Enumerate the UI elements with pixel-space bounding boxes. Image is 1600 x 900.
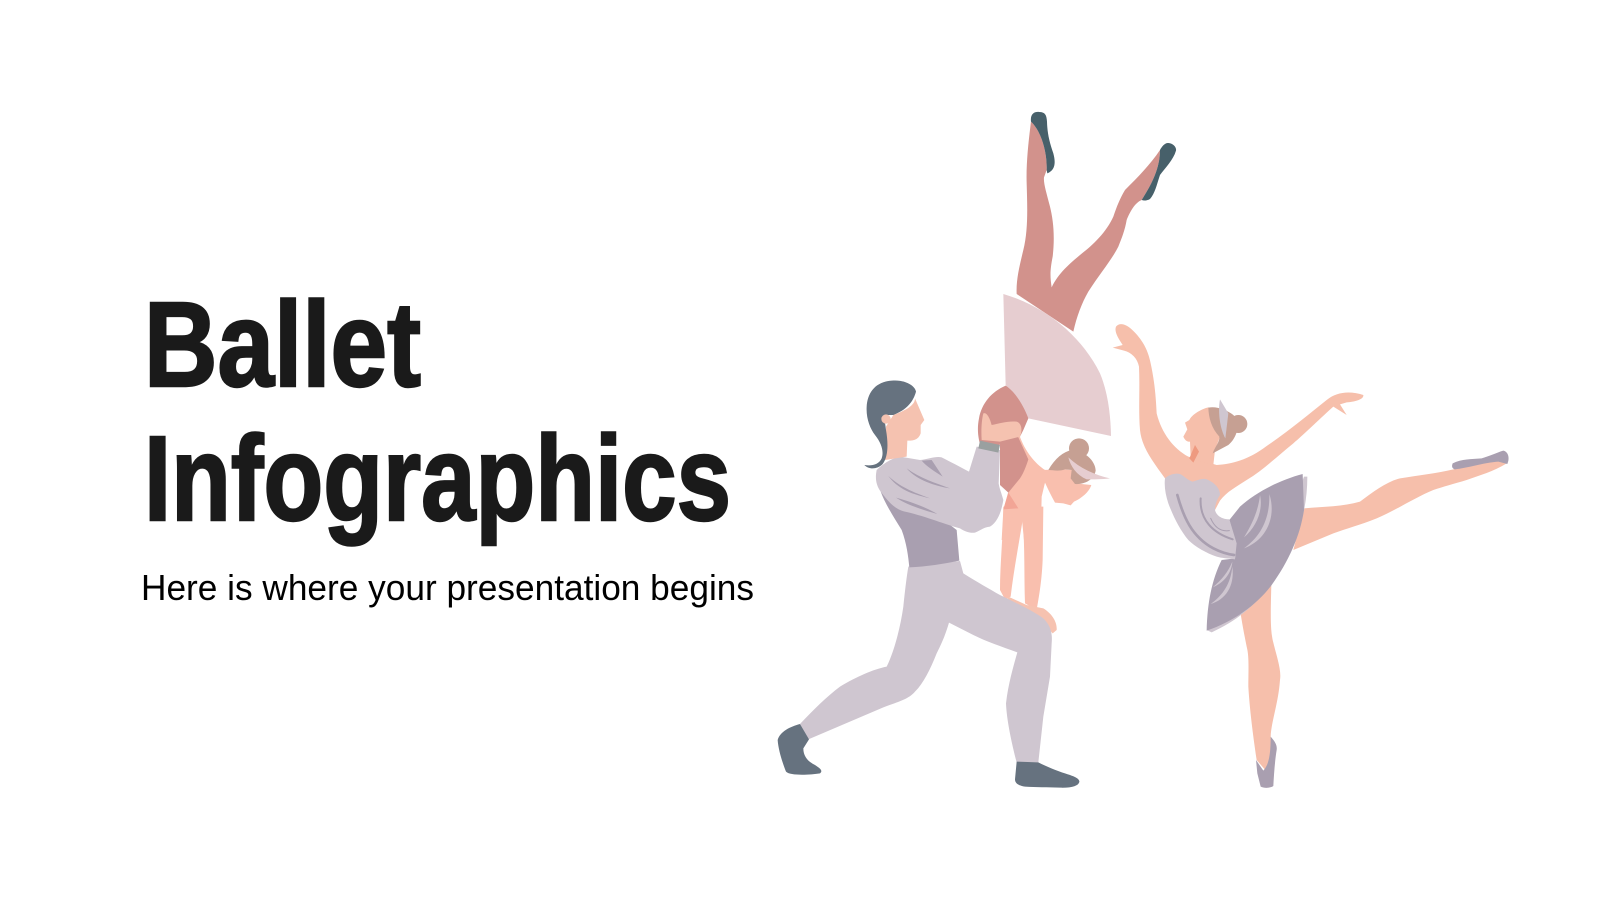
face and neck [1183, 407, 1220, 465]
shirt [876, 447, 1003, 533]
bun [1229, 415, 1247, 433]
tiara [1068, 457, 1110, 479]
left shoe [778, 724, 821, 775]
bodice [1000, 437, 1028, 493]
skirt folds [1211, 494, 1272, 604]
cuff [978, 441, 1000, 453]
standing leg [1240, 573, 1280, 772]
tiara [1219, 399, 1228, 438]
subtitle: Here is where your presentation begins [141, 567, 754, 608]
hair [1048, 450, 1096, 484]
bodice [1165, 474, 1237, 559]
title: Ballet [144, 276, 421, 412]
illustration: arabesque ballerina [1113, 324, 1509, 788]
hand on hip [981, 413, 1021, 442]
pointe shoe right [1142, 143, 1176, 201]
illustration: lifted ballerina torso and head [1000, 435, 1110, 540]
title [144, 276, 731, 546]
torso and arms [1113, 324, 1363, 510]
right shoe [1015, 762, 1079, 788]
face [1042, 469, 1091, 505]
title: Infographics [144, 410, 731, 546]
illustration: lifted ballerina arms [1000, 507, 1057, 633]
bodice folds [1177, 495, 1234, 555]
hand on knee [1007, 597, 1057, 633]
shirt folds [888, 460, 950, 514]
neck and face [885, 398, 924, 460]
illustration: male dancer [778, 441, 1079, 788]
neck accent [1189, 445, 1199, 463]
rear leg [1293, 457, 1507, 550]
trousers [800, 561, 1052, 762]
lifted ballerina skirt [1003, 294, 1111, 436]
illustration: lifted ballerina upper body [978, 112, 1176, 449]
rear shoe [1452, 451, 1509, 469]
torso [1000, 435, 1050, 540]
pointe shoe [1256, 737, 1277, 788]
lifted ballerina legs [1017, 122, 1160, 332]
vest [881, 492, 959, 567]
arms [1000, 507, 1043, 610]
male dancer head [864, 380, 1021, 468]
lifted ballerina hips [978, 386, 1028, 449]
pointe shoe [1031, 112, 1055, 173]
ear [881, 414, 891, 424]
accent [1003, 493, 1018, 509]
skirt rim [1207, 477, 1307, 632]
skirt [1207, 474, 1304, 631]
bun [1069, 438, 1089, 458]
hair [864, 380, 916, 468]
hair [1208, 407, 1238, 453]
